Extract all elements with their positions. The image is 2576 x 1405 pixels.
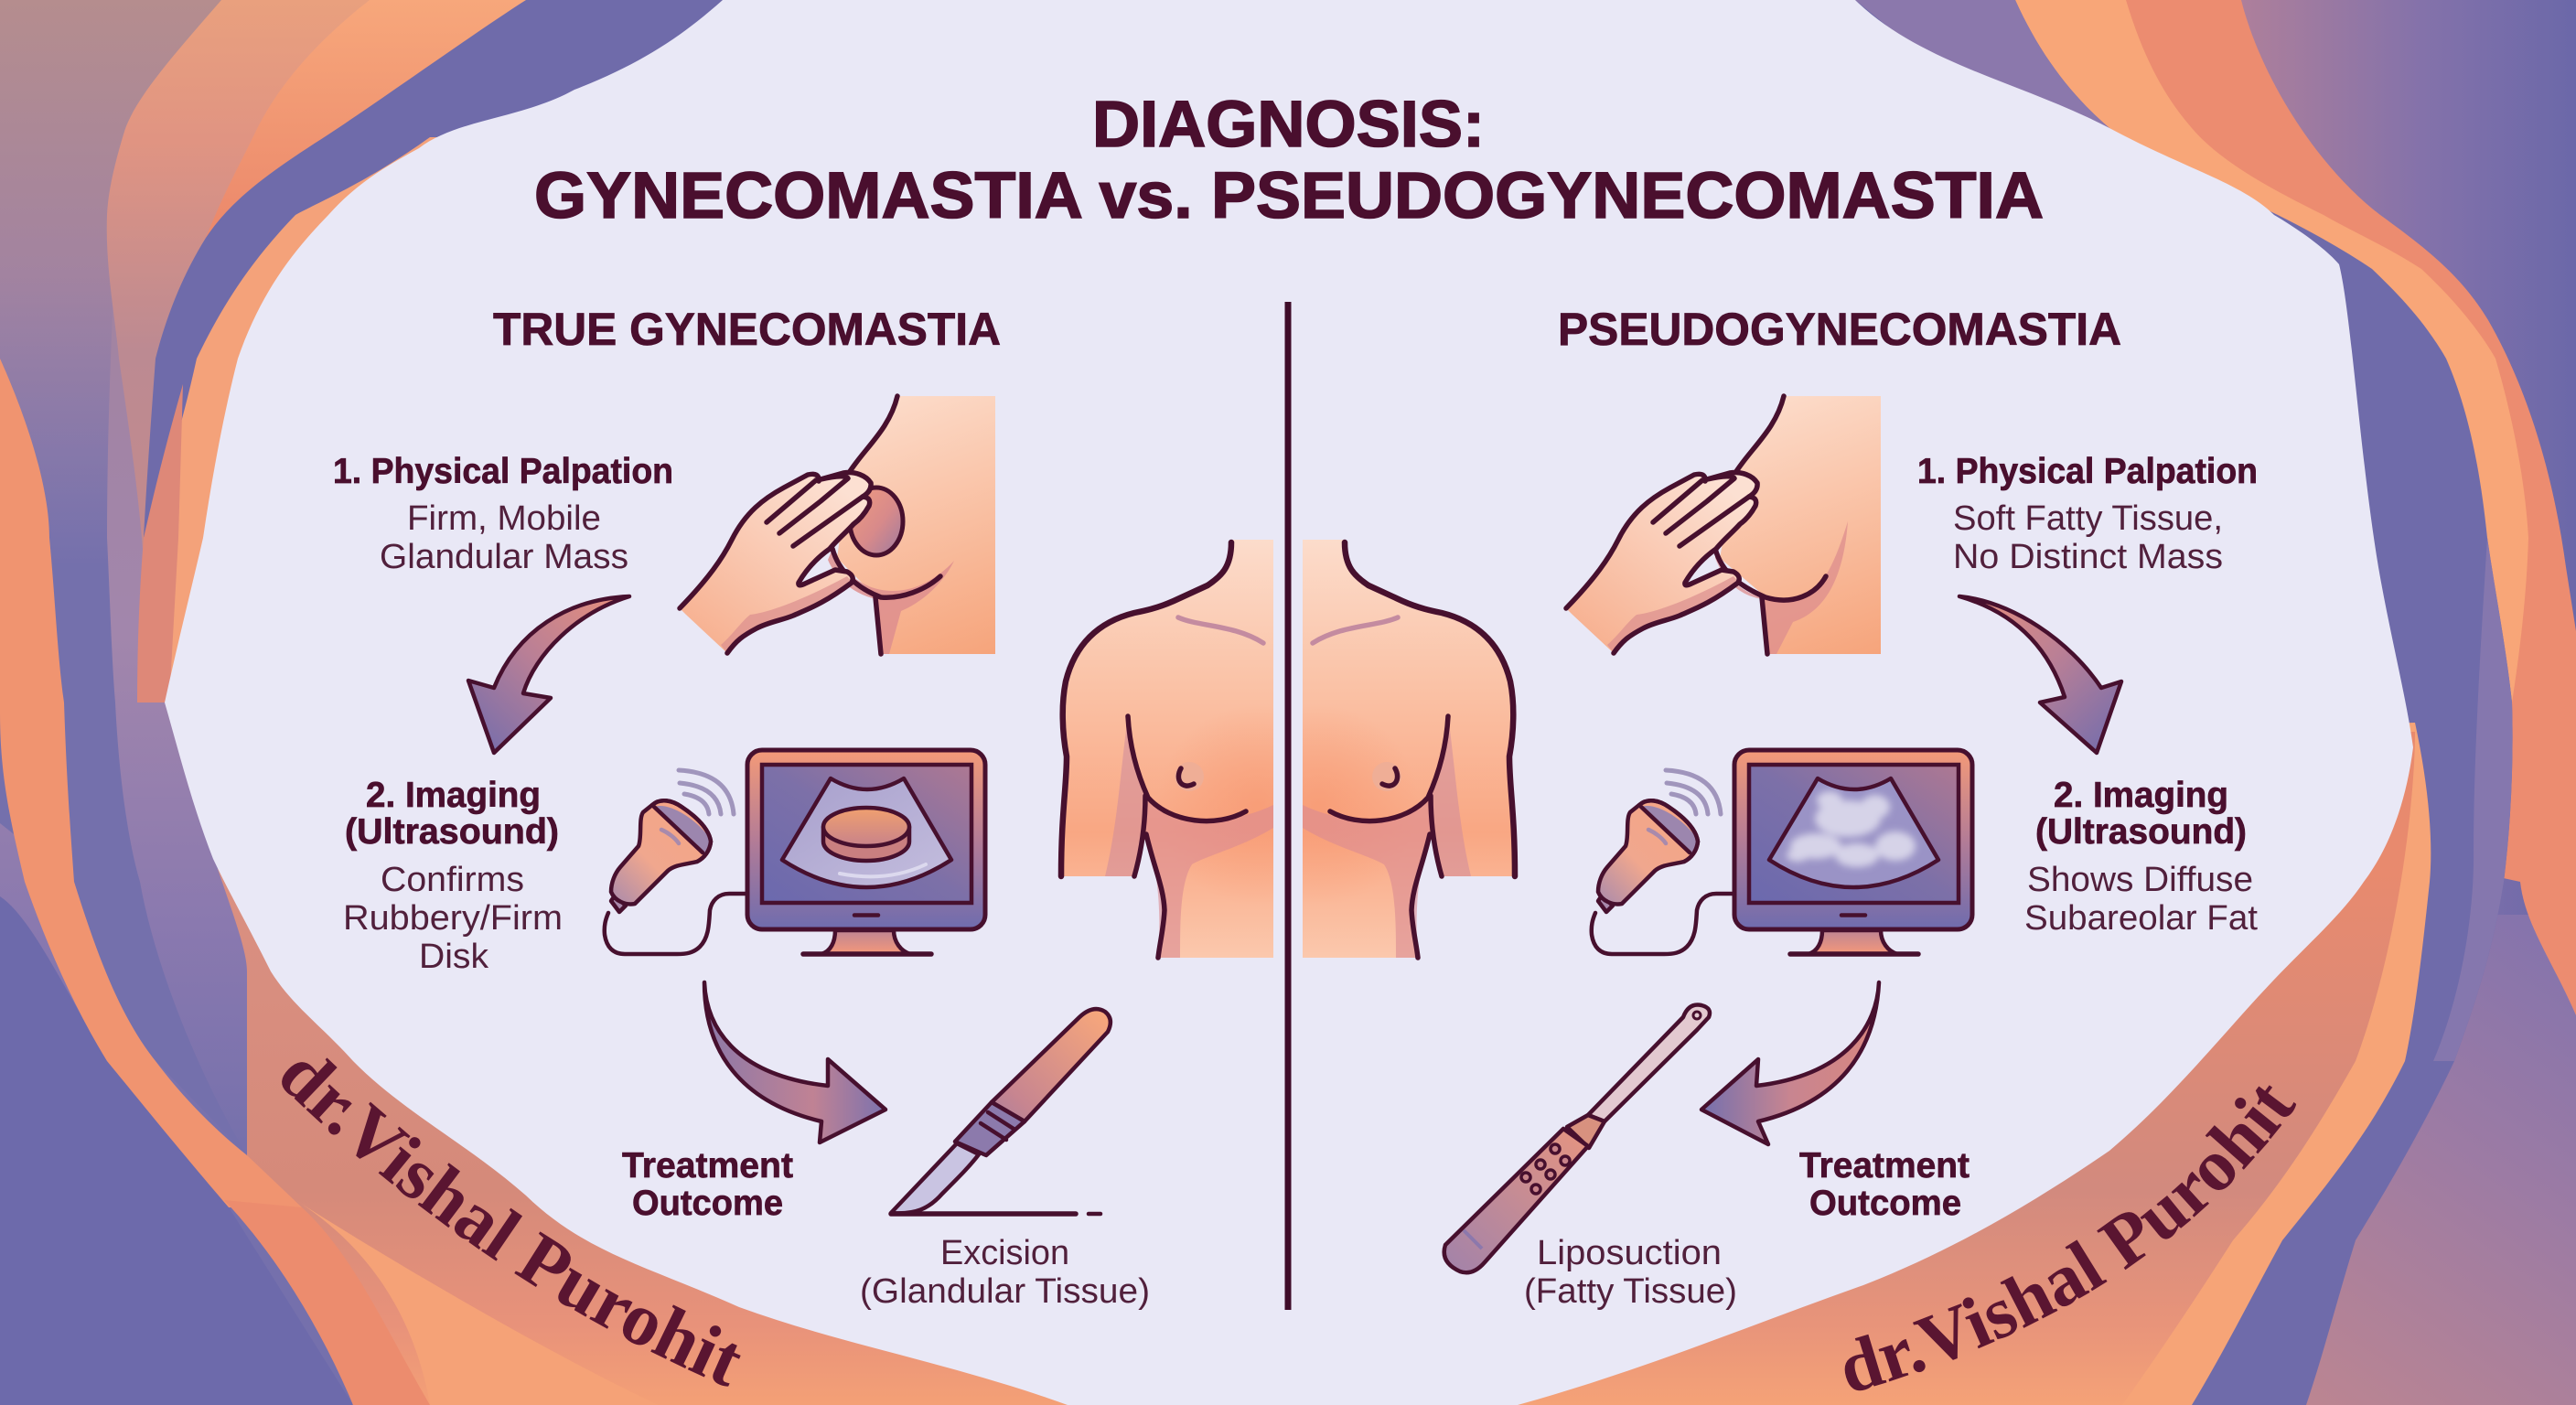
step text: right imaging [2024,776,2258,938]
text: liposuction: Liposuction [1537,1234,1722,1272]
icon: palpating hand, right [1566,473,1758,653]
text: right treatment outcome: Outcome [1809,1184,1961,1223]
step text: left palpation [333,452,673,576]
title: DIAGNOSIS: [1092,89,1485,161]
step text: left imaging: Confirms [381,861,524,899]
torso illustration: left half [1061,540,1273,958]
icon: palpating hand [680,473,872,653]
text: liposuction [1524,1234,1737,1311]
centre divider line [1284,302,1292,1310]
icon: ultrasound probe with cable, right [1592,770,1733,954]
text: right treatment outcome: Treatment [1799,1146,1970,1185]
step text: left palpation: Glandular Mass [380,538,628,576]
text: left treatment outcome: Outcome [632,1184,783,1223]
step text: left imaging: Disk [419,938,489,976]
step text: right imaging: Shows Diffuse [2027,861,2253,899]
torso illustration: right half [1303,540,1515,958]
step text: right palpation: Soft Fatty Tissue, [1953,499,2223,538]
column heading: pseudogynecomastia: PSEUDOGYNECOMASTIA [1558,304,2121,355]
arrow: imaging to treatment, left [704,982,886,1142]
step text: left palpation: Firm, Mobile [407,499,601,538]
step text: left imaging: (Ultrasound) [345,812,559,852]
watermark: right: dr.Vishal Purohit [1844,1085,2296,1390]
arrow: palpation to imaging, left [468,596,629,753]
step text: right imaging: Subareolar Fat [2024,899,2258,938]
icon: monitor with firm disk [747,750,985,954]
step text: left imaging [343,776,563,976]
icon: scalpel [891,1009,1111,1214]
step text: right imaging: (Ultrasound) [2035,812,2247,852]
step text: left imaging: 2. Imaging [366,776,541,815]
icon: liposuction cannula [1444,1005,1710,1272]
title [534,89,2044,232]
step text: right palpation [1917,452,2258,576]
step text: left imaging: Rubbery/Firm [343,899,563,938]
icon: monitor with diffuse fat [1734,750,1972,954]
body panel: firm lump [828,396,995,654]
arrow: palpation to imaging, right [1959,596,2121,753]
text: left treatment outcome: Treatment [622,1146,793,1185]
text: excision: Excision [940,1234,1069,1272]
step text: right palpation: No Distinct Mass [1953,538,2223,576]
text: excision: (Glandular Tissue) [860,1272,1150,1311]
step text: left palpation: 1. Physical Palpation [333,452,673,491]
title: GYNECOMASTIA vs. PSEUDOGYNECOMASTIA [534,160,2044,232]
step text: right imaging: 2. Imaging [2054,776,2228,815]
text: right treatment outcome [1799,1146,1970,1223]
arrow: imaging to treatment, right [1701,982,1879,1144]
body panel: soft fatty tissue [1715,396,1881,654]
text: left treatment outcome [622,1146,793,1223]
step text: right palpation: 1. Physical Palpation [1917,452,2258,491]
icon: ultrasound probe with cable [605,770,746,954]
column heading: true gynecomastia: TRUE GYNECOMASTIA [493,304,1001,355]
watermark: left: dr.Vishal Purohit [282,1057,741,1387]
text: liposuction: (Fatty Tissue) [1524,1272,1737,1311]
text: excision [860,1234,1150,1311]
